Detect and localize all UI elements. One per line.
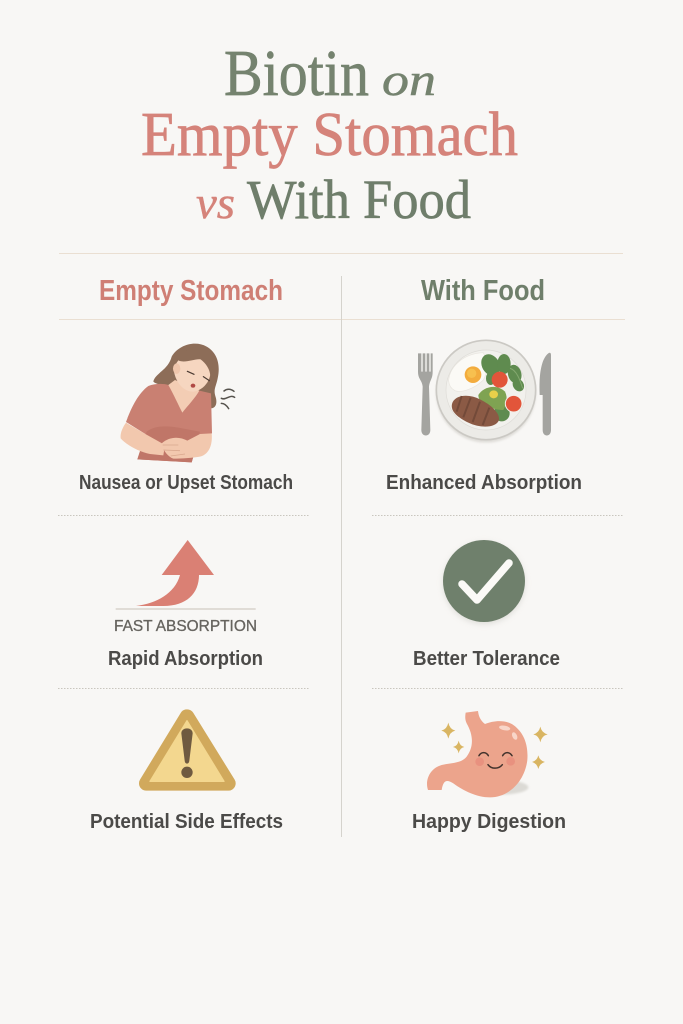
label: enhanced absorption: Enhanced Absorption <box>386 472 582 494</box>
icon: fast absorption arrow <box>116 540 256 609</box>
icon: warning triangle <box>146 717 228 783</box>
icon: woman with stomach ache <box>121 344 235 462</box>
panel: with food <box>386 275 582 833</box>
heading: with food: With Food <box>421 275 545 307</box>
label: rapid absorption: Rapid Absorption <box>108 648 263 670</box>
heading: empty stomach: Empty Stomach <box>99 275 283 307</box>
caption: fast absorption: FAST ABSORPTION <box>114 618 257 635</box>
icon: plate of food with cutlery <box>418 340 551 443</box>
title: on <box>382 54 436 105</box>
title: vs <box>196 177 235 228</box>
label: potential side effects: Potential Side Effects <box>90 811 283 833</box>
panel: empty stomach <box>79 275 293 833</box>
title: Biotin <box>224 37 369 110</box>
icon: check mark badge <box>443 540 525 624</box>
label: better tolerance: Better Tolerance <box>413 648 560 670</box>
label: happy digestion: Happy Digestion <box>412 811 566 833</box>
title: Empty Stomach <box>141 101 518 169</box>
title: With Food <box>247 169 471 230</box>
label: nausea: Nausea or Upset Stomach <box>79 472 293 494</box>
title <box>141 37 518 230</box>
icon: happy stomach with sparkles <box>427 711 548 797</box>
